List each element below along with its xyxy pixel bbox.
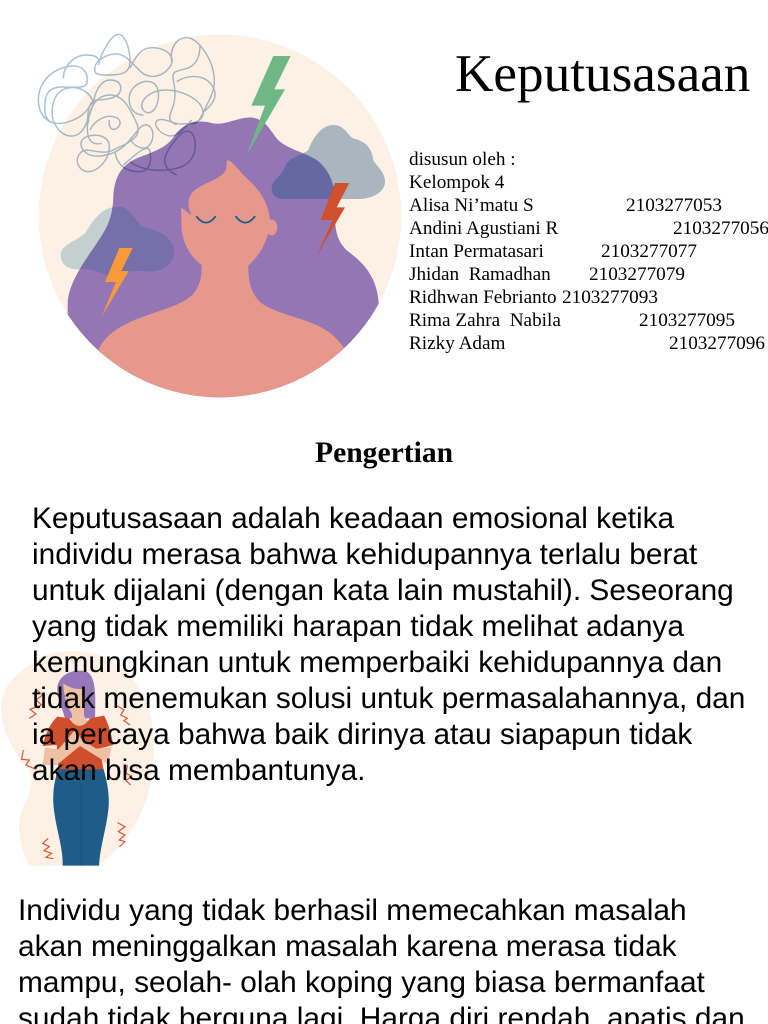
jeans [53, 768, 109, 866]
group members list: 2103277096 [669, 333, 765, 354]
cloud: right [272, 125, 385, 199]
bolt: red [317, 183, 349, 256]
closed eyes [197, 217, 255, 223]
group members list: Ridhwan Febrianto [409, 287, 557, 308]
paragraph: individual coping [18, 894, 745, 1024]
paragraph: definition: ia percaya bahwa baik dirinya atau siapapun tidak [32, 718, 692, 751]
paragraph: individual coping: Individu yang tidak berhasil memecahkan masalah [18, 894, 687, 927]
illustration: woman with tangled thoughts and storm clouds [38, 34, 402, 398]
group members list: 2103277095 [639, 310, 735, 331]
illustration: worried standing woman with peach blob [1, 651, 154, 866]
cloud: left [61, 207, 174, 277]
paragraph: individual coping: akan meninggalkan masalah karena merasa tidak [18, 930, 677, 963]
hair [57, 671, 95, 718]
group members list: Intan Permatasari [409, 241, 544, 262]
group members list [409, 149, 768, 354]
paragraph: definition [32, 502, 745, 787]
paragraph: definition: yang tidak memiliki harapan tidak melihat adanya [32, 610, 684, 643]
background circle [39, 35, 401, 397]
group members list: Kelompok 4 [409, 172, 504, 193]
face and neck [63, 683, 90, 728]
peach blob [1, 651, 154, 866]
paragraph: definition: untuk dijalani (dengan kata lain mustahil). Seseorang [32, 574, 734, 607]
hair [68, 117, 379, 420]
group members list: Jhidan Ramadhan [409, 264, 551, 285]
group members list: 2103277077 [601, 241, 697, 262]
bolt: green [247, 56, 291, 155]
group members list: Andini Agustiani R [409, 218, 558, 239]
group members list: 2103277053 [626, 195, 722, 216]
paragraph: definition: kemungkinan untuk memperbaiki kehidupannya dan [32, 646, 722, 679]
body and face [98, 160, 345, 420]
paragraph: definition: tidak menemukan solusi untuk permasalahannya, dan [32, 682, 745, 715]
paragraph: definition: akan bisa membantunya. [32, 754, 365, 787]
group members list: 2103277079 [589, 264, 685, 285]
bolt: orange [102, 248, 133, 317]
group members list: Alisa Ni’matu S [409, 195, 534, 216]
paragraph: definition: Keputusasaan adalah keadaan emosional ketika [32, 502, 674, 535]
arms and hands [43, 730, 112, 765]
group members list: Rizky Adam [409, 333, 505, 354]
jeans seam [80, 783, 82, 866]
stress zigzags [22, 690, 132, 859]
title: Keputusasaan [455, 44, 750, 103]
group members list: 2103277093 [562, 287, 658, 308]
paragraph: definition: individu merasa bahwa kehidupannya terlalu berat [32, 538, 697, 571]
heading: Pengertian: Pengertian [315, 437, 453, 469]
tangled thought scribble [38, 34, 215, 175]
paragraph: individual coping: mampu, seolah- olah koping yang biasa bermanfaat [18, 966, 705, 999]
group members list: 2103277056 [673, 218, 768, 239]
cloud overlap on hair [80, 153, 334, 276]
group members list: disusun oleh : [409, 149, 516, 170]
ear [266, 219, 277, 235]
group members list: Rima Zahra Nabila [409, 310, 561, 331]
shirt [43, 716, 113, 769]
